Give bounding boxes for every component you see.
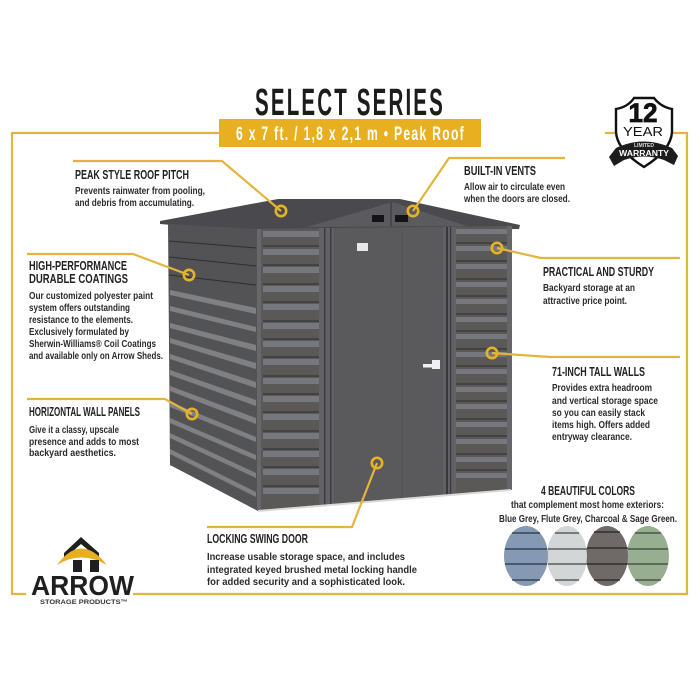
warranty badge: 12: [628, 98, 658, 128]
swing door: [334, 228, 443, 503]
warranty badge: YEAR: [623, 124, 663, 139]
front wall: [257, 226, 512, 511]
callout: locking swing door: for added security and a sophisticated look.: [207, 576, 405, 588]
swatch: sage green: [627, 526, 669, 586]
callout: 71-inch tall walls: items high. Offers added: [552, 419, 650, 431]
callout: practical and sturdy: [492, 243, 680, 307]
callout: high-performance durable coatings: Our customized polyester paint: [29, 290, 153, 302]
callout: high-performance durable coatings: system offers outstanding: [29, 302, 130, 314]
callout: high-performance durable coatings: resistance to the elements.: [29, 314, 133, 326]
callout: horizontal wall panels: Give it a classy, upscale: [29, 424, 119, 436]
callout: peak style roof pitch: and debris from accumulating.: [75, 197, 194, 209]
warranty badge: [609, 98, 678, 167]
arrow logo: [31, 537, 135, 606]
swatch: flute grey: [547, 526, 587, 586]
colors text: that complement most home exteriors:: [511, 499, 664, 511]
frame border: [12, 133, 687, 594]
left side wall: [168, 224, 258, 511]
door badge: [357, 243, 368, 251]
callout: 71-inch tall walls: [487, 348, 680, 443]
callout: high-performance durable coatings: HIGH-PERFORMANCE: [29, 259, 127, 273]
callout: high-performance durable coatings: and available only on Arrow Sheds.: [29, 350, 163, 362]
callout: horizontal wall panels: presence and adds to most: [29, 436, 139, 448]
callout: locking swing door: Increase usable storage space, and includes: [207, 551, 405, 563]
swatch: charcoal: [586, 526, 628, 586]
callout: peak style roof pitch: [73, 161, 286, 216]
logo tagline: STORAGE PRODUCTS™: [40, 599, 128, 606]
callout: locking swing door: [207, 458, 417, 588]
callout: horizontal wall panels: HORIZONTAL WALL PANELS: [29, 405, 140, 419]
callout: high-performance durable coatings: DURABLE COATINGS: [29, 272, 128, 286]
callout: peak style roof pitch: Prevents rainwater from pooling,: [75, 185, 205, 197]
warranty badge: LIMITED: [634, 143, 654, 149]
roof vents: [372, 215, 408, 222]
callout: 71-inch tall walls: Provides extra headroom: [552, 382, 652, 394]
callout: horizontal wall panels: [27, 399, 197, 459]
gable: [307, 202, 467, 227]
callout: built-in vents: Allow air to circulate even: [464, 181, 565, 193]
callout: practical and sturdy: Backyard storage at an: [543, 282, 635, 294]
callout: built-in vents: [408, 158, 570, 216]
callout: 71-inch tall walls: 71-INCH TALL WALLS: [552, 365, 645, 379]
callout: high-performance durable coatings: [27, 254, 194, 362]
colors text: [499, 484, 677, 525]
swatch: blue grey: [504, 526, 548, 586]
colors text: 4 BEAUTIFUL COLORS: [541, 484, 635, 498]
callout: practical and sturdy: PRACTICAL AND STURDY: [543, 265, 654, 279]
callout: 71-inch tall walls: and vertical storage space: [552, 395, 658, 407]
warranty badge: WARRANTY: [619, 149, 670, 158]
callout: locking swing door: LOCKING SWING DOOR: [207, 532, 308, 546]
callout: 71-inch tall walls: so you can easily stack: [552, 407, 645, 419]
door handle: [423, 360, 440, 369]
callout: built-in vents: BUILT-IN VENTS: [464, 164, 536, 178]
size banner: 6 x 7 ft. / 1,8 x 2,1 m • Peak Roof: [236, 124, 465, 145]
title: SELECT SERIES: [255, 82, 445, 124]
roof backing: [160, 199, 520, 232]
size banner: [219, 119, 481, 147]
callout: high-performance durable coatings: Exclusively formulated by: [29, 326, 129, 338]
callout: practical and sturdy: attractive price point.: [543, 295, 627, 307]
callout: locking swing door: integrated keyed brushed metal locking handle: [207, 564, 417, 576]
logo wordmark: ARROW: [31, 570, 135, 601]
callout: high-performance durable coatings: Sherwin-Williams® Coil Coatings: [29, 338, 156, 350]
color swatches: [504, 526, 669, 586]
callout: horizontal wall panels: backyard aesthetics.: [29, 447, 116, 459]
shed illustration: [160, 199, 520, 511]
callout: 71-inch tall walls: entryway clearance.: [552, 431, 632, 443]
logo house icon: [57, 537, 107, 572]
callout: peak style roof pitch: PEAK STYLE ROOF PITCH: [75, 168, 189, 182]
floor edge: [258, 490, 511, 511]
callout: built-in vents: when the doors are closed.: [463, 193, 570, 205]
